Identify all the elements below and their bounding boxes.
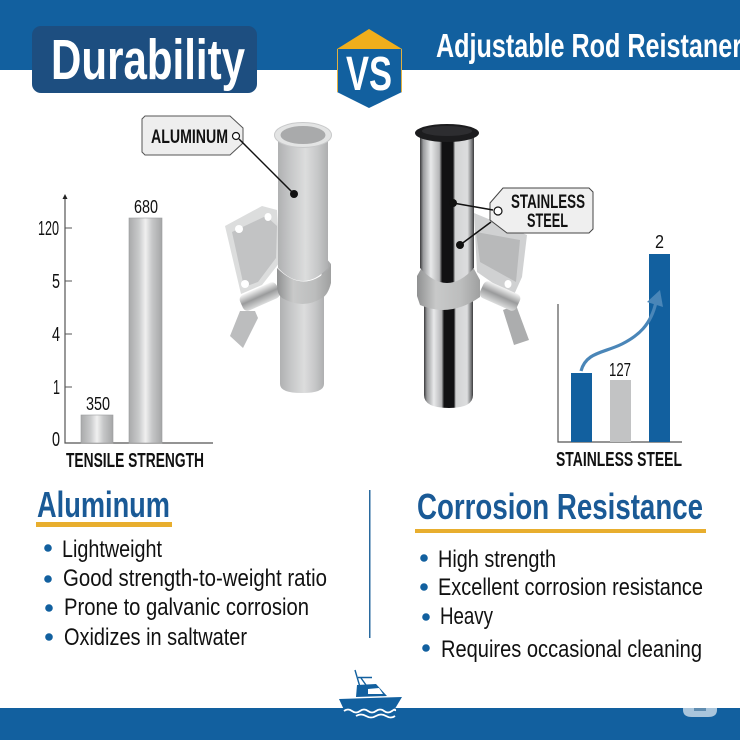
rim [274,122,332,148]
bolt [478,280,522,312]
wing nut [230,311,258,348]
callout: stainless steel [449,188,593,249]
callout: aluminum [142,116,298,198]
bracket [225,206,280,294]
panel: aluminum: Prone to galvanic corrosion [64,594,309,621]
center divider [369,490,370,638]
bar chart: tensile strength: 5 [52,271,60,293]
collar front [277,264,331,304]
stainless steel rod holder [415,124,529,408]
panel: aluminum: Good strength-to-weight ratio [63,565,327,592]
bracket [474,213,527,297]
wing nut [503,305,529,345]
aluminum rod holder [225,122,332,393]
VS badge: VS [346,48,392,101]
bar chart: tensile strength: 350 [86,394,110,414]
VS badge [337,29,402,108]
panel: corrosion resistance: High strength [438,546,556,573]
panel: aluminum: Lightweight [62,536,162,563]
panel: aluminum [36,484,327,651]
bar chart: tensile strength: TENSILE STRENGTH [66,450,204,472]
panel: aluminum: Aluminum [37,484,170,525]
bar chart: stainless steel: 127 [609,360,631,380]
icon: boat [339,670,402,718]
bar chart: tensile strength: 0 [52,429,60,451]
title: Durability: Durability [51,28,245,92]
upper tube [420,133,474,283]
bar chart: stainless steel [556,232,682,471]
lower tube [280,295,324,393]
callout: aluminum: ALUMINUM [151,127,228,148]
collar [417,269,480,310]
bar chart: tensile strength: 680 [134,197,158,217]
bolt [238,281,282,312]
lower tube [424,300,473,408]
rim [415,124,479,142]
watermark badge [683,708,717,717]
bar chart: tensile strength: 4 [52,324,60,346]
bar chart: stainless steel: STAINLESS STEEL [556,449,682,471]
panel: corrosion resistance: Heavy [440,603,493,630]
bar chart: tensile strength: 120 [38,218,59,240]
callout: stainless steel: STAINLESS [511,192,585,213]
bar chart: tensile strength [38,194,213,472]
footer band [0,708,740,740]
header band [0,0,740,70]
callout: stainless steel: STEEL [527,211,568,232]
collar back [320,258,331,280]
panel: aluminum: Oxidizes in saltwater [64,624,247,651]
upper tube [278,135,328,281]
bar chart: stainless steel: 2 [655,232,664,252]
growth arrow [581,290,663,371]
bar chart: tensile strength: 1 [53,377,60,399]
panel: corrosion resistance [415,486,706,663]
